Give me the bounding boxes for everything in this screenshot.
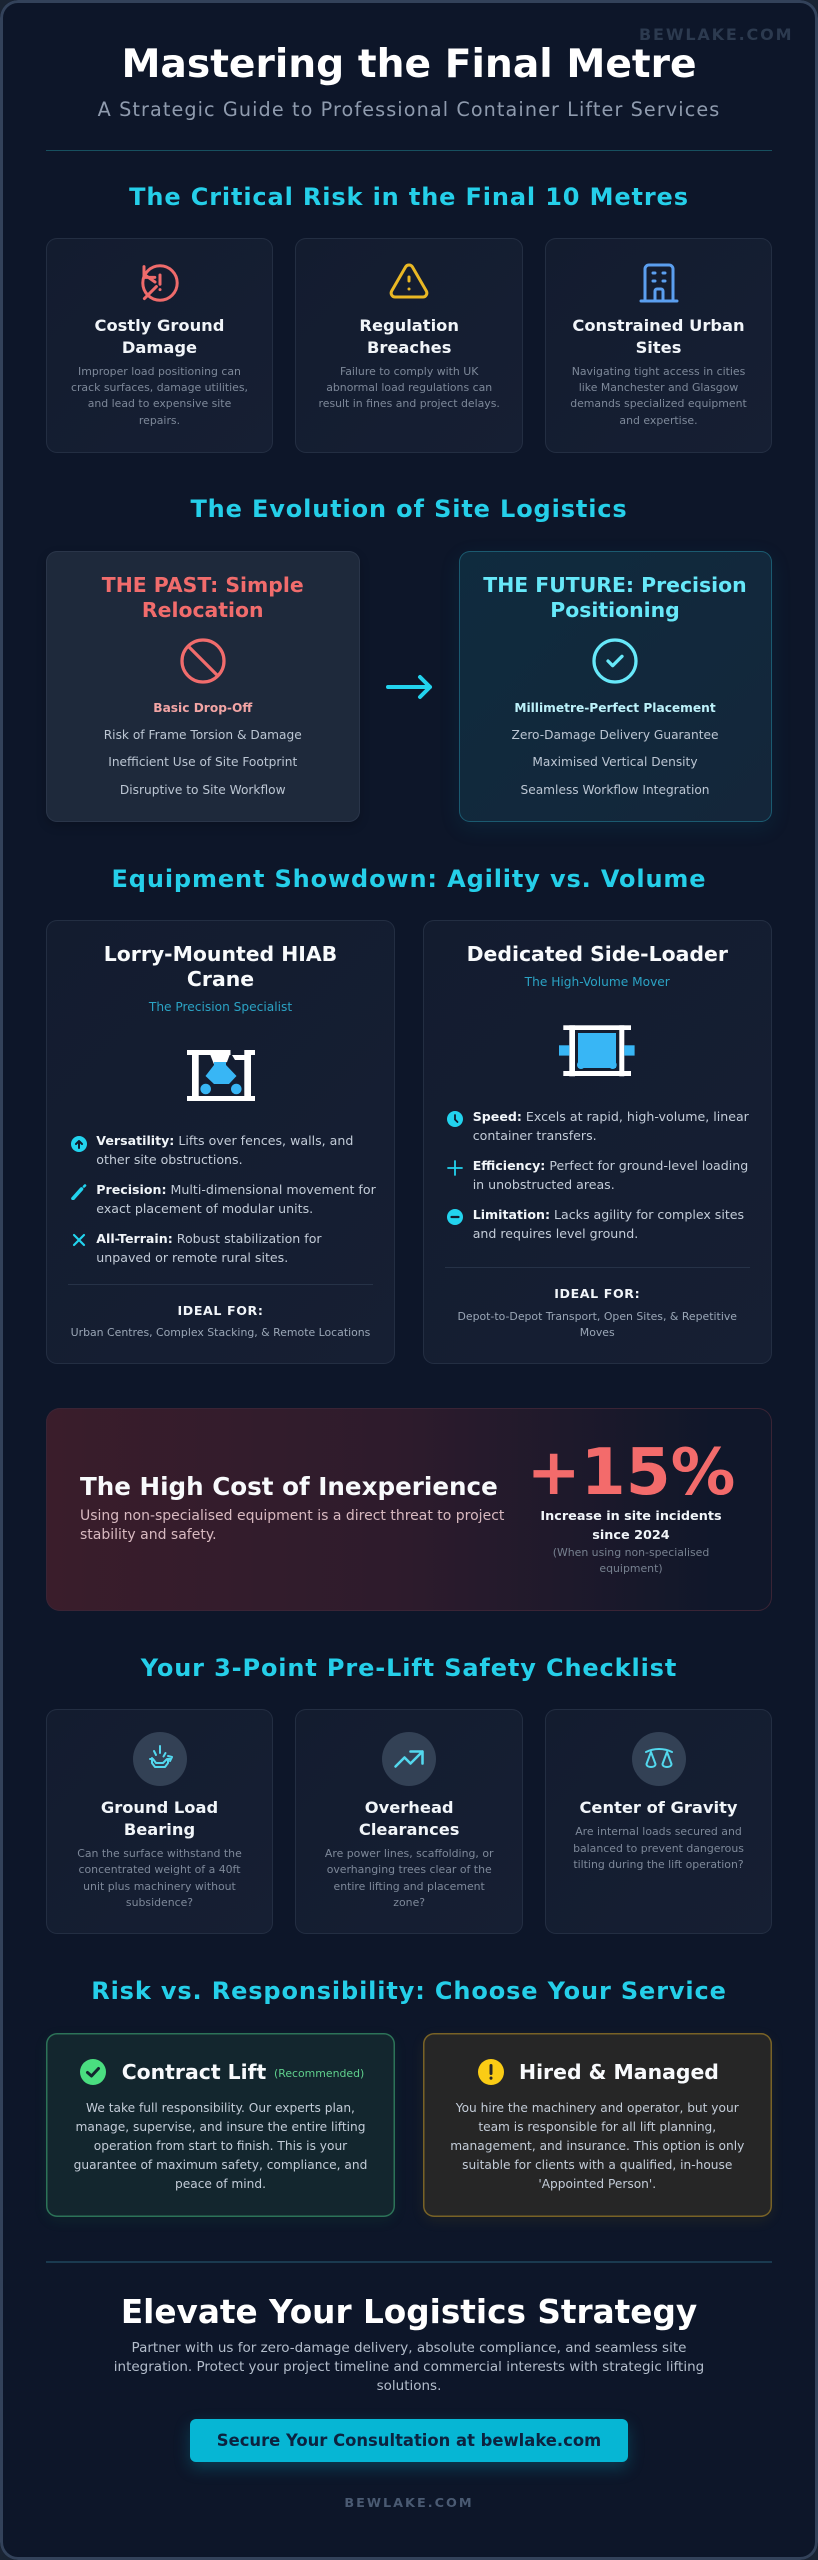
icon: plus (447, 1160, 463, 1176)
feature: speed (473, 1108, 749, 1142)
card text: result in fines and project delays. (318, 397, 500, 410)
card text: Failure to comply with UK (340, 365, 478, 378)
service text: 'Appointed Person'. (538, 2177, 656, 2191)
arrow (386, 674, 432, 700)
icon: green check (80, 2059, 106, 2085)
card text: Can the surface withstand the (77, 1847, 242, 1860)
CTA button: Secure Your Consultation at bewlake.com (217, 2430, 601, 2450)
ideal for label: IDEAL FOR: (178, 1303, 263, 1318)
card text: subsidence? (126, 1896, 193, 1909)
card title: Sites (636, 338, 681, 357)
service title: Hired & Managed (519, 2060, 719, 2084)
card text: Navigating tight access in cities (572, 365, 745, 378)
icon: arrow up circle (71, 1136, 87, 1152)
card title: Overhead (365, 1798, 454, 1817)
card title (572, 316, 745, 357)
callout text: stability and safety. (80, 1527, 217, 1543)
card text (46, 1846, 273, 1911)
feature: limitation: Limitation: Lacks agility for complex sites (473, 1206, 744, 1222)
ideal for text: Moves (580, 1326, 615, 1339)
past title: THE PAST: Simple (102, 572, 304, 596)
icon: ban (180, 638, 226, 684)
card text (295, 1846, 523, 1911)
card text: zone? (393, 1896, 425, 1909)
card text (318, 365, 500, 410)
past list: Risk of Frame Torsion & Damage (104, 728, 302, 742)
CTA heading: Elevate Your Logistics Strategy (121, 2293, 697, 2331)
card text: like Manchester and Glasgow (579, 381, 738, 394)
CTA text: solutions. (377, 2378, 441, 2394)
icon: side-loader (559, 1025, 635, 1076)
callout heading: The High Cost of Inexperience (80, 1472, 498, 1501)
card text: Are power lines, scaffolding, or (325, 1847, 493, 1860)
panel: hired and managed (423, 2033, 772, 2217)
card title: Ground Load (101, 1798, 218, 1817)
card text: and expertise. (619, 414, 698, 427)
side-loader title: Dedicated Side-Loader (467, 942, 728, 966)
card text: crack surfaces, damage utilities, (71, 381, 248, 394)
icon: cross (72, 1234, 86, 1246)
future label: Millimetre-Perfect Placement (514, 701, 716, 715)
feature: efficiency: Efficiency: Perfect for ground-level loading (473, 1158, 748, 1172)
panel: HIAB crane (46, 920, 395, 1364)
card title: Costly Ground (95, 316, 224, 335)
CTA button (190, 2418, 628, 2462)
icon circle: gravity (632, 1732, 686, 1786)
icon: minus circle (447, 1209, 463, 1225)
stat value: +15% (527, 1434, 735, 1510)
card title (101, 1798, 218, 1839)
card text: demands specialized equipment (570, 397, 747, 410)
feature: all-terrain: All-Terrain: Robust stabilization for (96, 1231, 322, 1246)
stat label: since 2024 (592, 1528, 670, 1543)
stat note: (When using non-specialised (553, 1546, 709, 1559)
service text: suitable for clients with a qualified, in-house (462, 2158, 732, 2172)
feature: versatility: Versatility: Lifts over fences, walls, and (96, 1133, 353, 1148)
future list (511, 728, 719, 796)
feature: versatility: other site obstructions. (96, 1152, 243, 1167)
icon: scales (642, 1743, 674, 1775)
ideal for text: Urban Centres, Complex Stacking, & Remote Locations (71, 1326, 370, 1339)
stat label: Increase in site incidents (540, 1509, 722, 1524)
service text: peace of mind. (175, 2177, 266, 2191)
feature: efficiency: in unobstructed areas. (473, 1176, 615, 1192)
feature: precision: exact placement of modular units. (96, 1201, 313, 1216)
subtitle: A Strategic Guide to Professional Container Lifter Services (98, 98, 720, 121)
future list: Zero-Damage Delivery Guarantee (511, 728, 719, 742)
heading: critical risk: The Critical Risk in the Final 10 Metres (129, 183, 689, 211)
feature: all-terrain: unpaved or remote rural sites. (96, 1250, 288, 1265)
card title: Breaches (367, 338, 451, 357)
card title: Constrained Urban (572, 316, 745, 335)
past list: Inefficient Use of Site Footprint (108, 755, 297, 769)
callout text (80, 1508, 504, 1543)
panel: high cost of inexperience (46, 1408, 772, 1610)
feature: precision: Precision: Multi-dimensional movement for (96, 1182, 376, 1197)
past title (102, 572, 304, 622)
CTA text (0, 2339, 818, 2397)
watermark: BEWLAKE.COM (639, 25, 793, 44)
card text (570, 365, 747, 427)
card title (359, 316, 459, 357)
stat note (553, 1546, 709, 1575)
card text: Are internal loads secured and (575, 1825, 742, 1838)
heading: evolution: The Evolution of Site Logistics (190, 495, 628, 523)
card text: repairs. (139, 414, 180, 427)
service title: Contract Lift (122, 2060, 266, 2084)
feature: speed: container transfers. (473, 1128, 597, 1142)
icon: building (640, 264, 678, 302)
crane title (104, 942, 337, 990)
icon circle: ground load (132, 1732, 186, 1786)
stat note: equipment) (599, 1562, 663, 1575)
service text: operation from start to finish. This is your (94, 2139, 347, 2153)
icon: clock (447, 1111, 463, 1127)
icon: ground damage (141, 264, 179, 302)
icon: trending up (391, 1741, 427, 1777)
card title: Center of Gravity (579, 1798, 738, 1817)
icon: crane (187, 1050, 255, 1101)
icon: pen (71, 1184, 86, 1200)
card title: Regulation (359, 316, 459, 335)
heading: equipment showdown: Equipment Showdown: Agility vs. Volume (112, 865, 706, 893)
future title: Positioning (550, 598, 680, 622)
ideal for text: Depot-to-Depot Transport, Open Sites, & Repetitive (458, 1310, 737, 1323)
future list: Maximised Vertical Density (532, 755, 698, 769)
panel: regulation breaches (295, 238, 523, 453)
card text: tilting during the lift operation? (573, 1858, 744, 1871)
ideal for label: IDEAL FOR: (554, 1286, 640, 1301)
panel: costly ground damage (46, 238, 273, 453)
feature: all-terrain (96, 1231, 322, 1265)
card text (71, 365, 248, 427)
heading: safety checklist: Your 3-Point Pre-Lift Safety Checklist (141, 1654, 677, 1682)
card text: Improper load positioning can (78, 365, 241, 378)
service text: management, and insurance. This option is only (450, 2139, 744, 2153)
past list (104, 728, 302, 796)
future title (483, 572, 747, 622)
feature: precision (96, 1182, 376, 1216)
crane subtitle: The Precision Specialist (149, 1000, 292, 1014)
panel: contract lift (46, 2033, 395, 2217)
feature: efficiency (473, 1158, 748, 1192)
crane title: Crane (187, 966, 254, 990)
card text (545, 1824, 772, 1873)
card title (95, 316, 224, 357)
stat label (540, 1509, 722, 1543)
recommended tag: (Recommended) (274, 2067, 364, 2080)
card title: Damage (122, 338, 197, 357)
CTA text: integration. Protect your project timeline and commercial interests with strategic lifting (114, 2359, 704, 2375)
feature: limitation: and requires level ground. (473, 1226, 638, 1240)
panel: constrained urban sites (545, 238, 772, 453)
service text: guarantee of maximum safety, compliance, and (74, 2158, 367, 2172)
CTA text: Partner with us for zero-damage delivery, absolute compliance, and seamless site (132, 2340, 686, 2356)
callout text: Using non-specialised equipment is a direct threat to project (80, 1508, 504, 1524)
card text: abnormal load regulations can (326, 381, 492, 394)
panel: side-loader (423, 920, 772, 1364)
card title: Bearing (124, 1820, 195, 1839)
past label: Basic Drop-Off (153, 701, 252, 715)
future title: THE FUTURE: Precision (483, 572, 747, 596)
service text (46, 2099, 395, 2194)
panel: center of gravity (545, 1709, 772, 1934)
feature: versatility (96, 1133, 353, 1167)
panel: the past (46, 551, 360, 822)
icon circle: overhead (382, 1732, 436, 1786)
panel: ground load bearing (46, 1709, 273, 1934)
side-loader subtitle: The High-Volume Mover (525, 975, 670, 989)
icon: check circle (592, 638, 638, 684)
icon: yellow warning (478, 2059, 504, 2085)
card text: entire lifting and placement (334, 1880, 485, 1893)
crane title: Lorry-Mounted HIAB (104, 942, 337, 966)
feature: speed: Speed: Excels at rapid, high-volume, linear (473, 1108, 749, 1124)
card title: Clearances (359, 1820, 459, 1839)
service text: You hire the machinery and operator, but your (456, 2101, 739, 2115)
ideal for text (458, 1310, 737, 1339)
future list: Seamless Workflow Integration (520, 782, 710, 796)
service text: team is responsible for all lift planning, (478, 2120, 716, 2134)
stat: +15% (527, 1434, 735, 1575)
footer brand: BEWLAKE.COM (344, 2496, 474, 2511)
feature: limitation (473, 1206, 744, 1240)
service text: We take full responsibility. Our experts plan, (86, 2101, 355, 2115)
panel: the future (458, 551, 772, 822)
service text: manage, supervise, and insure the entire lifting (76, 2120, 365, 2134)
panel: overhead clearances (295, 1709, 523, 1934)
icon: warning triangle (390, 264, 428, 298)
title: Mastering the Final Metre (121, 42, 697, 87)
card text: overhanging trees clear of the (327, 1863, 492, 1876)
service text (423, 2099, 772, 2194)
heading: choose your service: Risk vs. Responsibility: Choose Your Service (91, 1977, 727, 2005)
feature list: crane (71, 1133, 376, 1265)
past title: Relocation (142, 598, 264, 622)
card text: concentrated weight of a 40ft (79, 1863, 240, 1876)
card text: balanced to prevent dangerous (573, 1842, 744, 1855)
card text: and lead to expensive site (88, 397, 231, 410)
past list: Disruptive to Site Workflow (120, 782, 286, 796)
card text: unit plus machinery without (83, 1880, 236, 1893)
icon: bowl (149, 1745, 173, 1768)
feature list: side-loader (447, 1108, 749, 1240)
card title (295, 1797, 523, 1841)
